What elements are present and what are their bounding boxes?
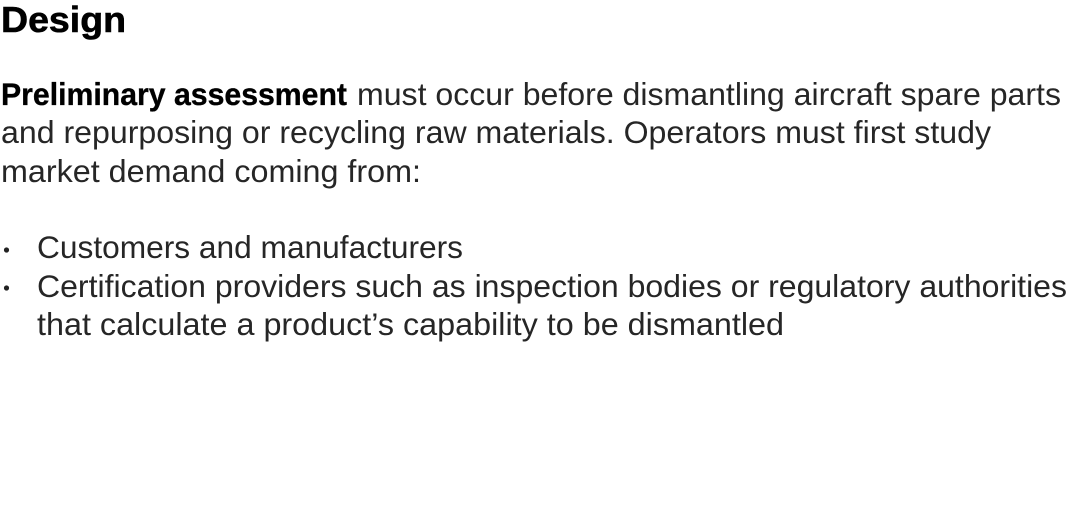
- text block: preliminary assessment intro: [1, 76, 1061, 189]
- text block: preliminary assessment intro: Preliminary assessment: [1, 76, 347, 112]
- title: Design: [1, 0, 126, 40]
- bullet list: Certification providers such as inspection bodies or regulatory authorities: [37, 268, 1067, 304]
- text block: preliminary assessment intro: must occur before dismantling aircraft spare parts: [357, 76, 1061, 112]
- text block: preliminary assessment intro: market demand coming from:: [1, 153, 421, 189]
- bullet list: [4, 229, 1067, 342]
- text block: preliminary assessment intro: and repurposing or recycling raw materials. Operators must first study: [1, 114, 991, 150]
- bullet list: Customers and manufacturers: [37, 229, 463, 265]
- bullet list: that calculate a product’s capability to be dismantled: [37, 306, 784, 342]
